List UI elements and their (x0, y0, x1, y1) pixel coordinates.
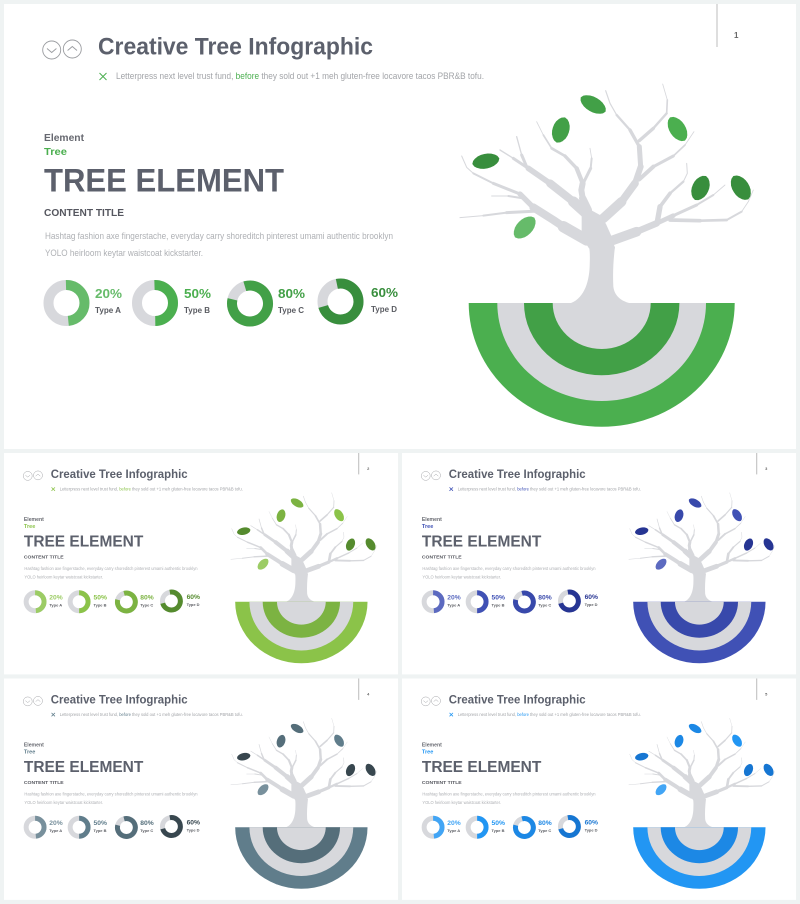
body text (24, 791, 198, 806)
stat labels: 80% (278, 286, 305, 301)
panel: sky blue slide (402, 678, 796, 900)
donut charts (424, 591, 580, 613)
title: Creative Tree Infographic (98, 34, 373, 60)
semicircle rings (633, 827, 766, 889)
label: tree: Tree (422, 750, 433, 756)
stat labels: 20% (95, 286, 122, 301)
content title: CONTENT TITLE (44, 208, 124, 219)
page number: 4 (367, 691, 370, 696)
stat labels: Type D (187, 828, 200, 833)
stat labels (447, 594, 598, 608)
tree (231, 718, 377, 828)
stat labels: Type B (94, 603, 107, 608)
title: Creative Tree Infographic (449, 467, 586, 481)
stat labels: 50% (94, 594, 107, 601)
leaves (236, 722, 378, 797)
panel: indigo slide (402, 453, 796, 674)
body text: YOLO heirloom keytar waistcoat kickstarter. (24, 800, 103, 806)
label: tree: Tree (44, 146, 67, 158)
stat labels: Type D (187, 602, 200, 607)
body text: YOLO heirloom keytar waistcoat kickstarter. (422, 574, 501, 580)
stat labels: 80% (538, 594, 552, 601)
body text: Hashtag fashion axe fingerstache, everyday carry shoreditch pinterest umami authentic brooklyn (45, 231, 393, 242)
stat labels: Type A (95, 306, 121, 315)
icon: cross mark (52, 713, 55, 716)
stat labels: 80% (538, 820, 552, 827)
stat labels: 50% (94, 820, 107, 827)
body text (24, 566, 198, 580)
stat labels: 50% (492, 820, 505, 827)
body text: Hashtag fashion axe fingerstache, everyday carry shoreditch pinterest umami authentic brooklyn (24, 791, 198, 797)
semicircle rings (235, 602, 368, 663)
stat labels: Type B (94, 828, 107, 833)
stat labels: Type C (538, 603, 551, 608)
tree (629, 493, 775, 602)
leaves (471, 91, 755, 243)
leaves (634, 722, 776, 797)
body text: YOLO heirloom keytar waistcoat kickstarter. (24, 574, 103, 580)
stat labels: Type C (278, 306, 304, 315)
icon: navigation chevrons (43, 40, 81, 59)
icon: navigation chevrons (421, 471, 440, 480)
stat labels: Type A (447, 603, 460, 608)
panel: slate slide (4, 678, 398, 900)
stat labels: 60% (585, 819, 598, 826)
icon: cross mark (100, 73, 106, 80)
stat labels: 20% (447, 594, 461, 601)
stat labels: 80% (140, 820, 154, 827)
heading: TREE ELEMENT (44, 162, 284, 198)
semicircle rings (235, 827, 368, 889)
stat labels: Type D (371, 305, 397, 314)
body text (422, 791, 596, 806)
title: Creative Tree Infographic (51, 693, 188, 707)
stat labels: 60% (187, 594, 200, 601)
stat labels: Type A (49, 603, 62, 608)
donut charts (48, 281, 361, 326)
title: Creative Tree Infographic (449, 693, 586, 707)
stat labels: 20% (49, 594, 63, 601)
body text: Hashtag fashion axe fingerstache, everyday carry shoreditch pinterest umami authentic brooklyn (422, 566, 596, 572)
stat labels: 50% (184, 286, 211, 301)
subtitle: Letterpress next level trust fund, before they sold out +1 meh gluten-free locavore tacos PBR&B tofu. (116, 71, 484, 82)
label: element: Element (44, 132, 84, 144)
icon: navigation chevrons (421, 696, 440, 706)
stat labels: Type B (184, 306, 210, 315)
icon: cross mark (450, 487, 453, 491)
body text: YOLO heirloom keytar waistcoat kickstarter. (45, 248, 203, 259)
label: tree: Tree (24, 750, 35, 756)
stat labels: Type A (447, 828, 460, 833)
content title: CONTENT TITLE (24, 554, 64, 560)
body text: Hashtag fashion axe fingerstache, everyday carry shoreditch pinterest umami authentic brooklyn (24, 566, 198, 572)
page number: 5 (765, 691, 768, 696)
subtitle: Letterpress next level trust fund, before they sold out +1 meh gluten-free locavore tacos PBR&B tofu. (458, 486, 641, 492)
stat labels: 20% (49, 820, 63, 827)
title: Creative Tree Infographic (51, 467, 188, 481)
label: element: Element (422, 517, 442, 523)
heading: TREE ELEMENT (422, 533, 542, 550)
stat labels: 50% (492, 594, 505, 601)
page number: 2 (367, 466, 370, 471)
body text (422, 566, 596, 580)
panel: light green slide (4, 453, 398, 674)
tree (460, 84, 753, 304)
label: tree: Tree (24, 524, 35, 530)
label: element: Element (24, 743, 44, 749)
stat labels: 60% (187, 819, 200, 826)
stat labels: Type C (538, 828, 551, 833)
stat labels: Type B (492, 828, 505, 833)
label: element: Element (24, 517, 44, 523)
page number: 3 (765, 466, 768, 471)
donut charts (26, 816, 182, 838)
stat labels: 20% (447, 820, 461, 827)
stat labels (95, 285, 398, 315)
stat labels: Type D (585, 828, 598, 833)
tree (231, 493, 377, 602)
stat labels: Type B (492, 603, 505, 608)
semicircle rings (633, 602, 766, 663)
icon: navigation chevrons (23, 696, 42, 706)
icon: navigation chevrons (23, 471, 42, 480)
leaves (236, 496, 378, 572)
donut charts (424, 816, 580, 838)
stat labels (49, 819, 200, 833)
stat labels: Type A (49, 828, 62, 833)
icon: cross mark (450, 713, 453, 716)
heading: TREE ELEMENT (422, 759, 542, 776)
stat labels: 80% (140, 594, 154, 601)
stat labels (447, 819, 598, 833)
content title: CONTENT TITLE (422, 554, 462, 560)
subtitle: Letterpress next level trust fund, before they sold out +1 meh gluten-free locavore tacos PBR&B tofu. (458, 712, 641, 718)
page number: 1 (734, 31, 739, 40)
label: element: Element (422, 743, 442, 749)
donut charts (26, 591, 182, 613)
icon: cross mark (52, 487, 55, 491)
stat labels: Type C (140, 603, 153, 608)
body text: Hashtag fashion axe fingerstache, everyday carry shoreditch pinterest umami authentic brooklyn (422, 791, 596, 797)
stat labels: 60% (585, 594, 598, 601)
heading: TREE ELEMENT (24, 759, 144, 776)
label: tree: Tree (422, 524, 433, 530)
semicircle rings (469, 303, 735, 427)
stat labels: Type C (140, 828, 153, 833)
leaves (634, 496, 776, 572)
stat labels: Type D (585, 602, 598, 607)
body text: YOLO heirloom keytar waistcoat kickstarter. (422, 800, 501, 806)
panel: main green slide (4, 4, 796, 449)
content title: CONTENT TITLE (24, 780, 64, 786)
subtitle: Letterpress next level trust fund, before they sold out +1 meh gluten-free locavore tacos PBR&B tofu. (60, 486, 243, 492)
body text (45, 231, 393, 259)
subtitle: Letterpress next level trust fund, before they sold out +1 meh gluten-free locavore tacos PBR&B tofu. (60, 712, 243, 718)
tree (629, 718, 775, 828)
heading: TREE ELEMENT (24, 533, 144, 550)
stat labels (49, 594, 200, 608)
stat labels: 60% (371, 285, 398, 300)
content title: CONTENT TITLE (422, 780, 462, 786)
